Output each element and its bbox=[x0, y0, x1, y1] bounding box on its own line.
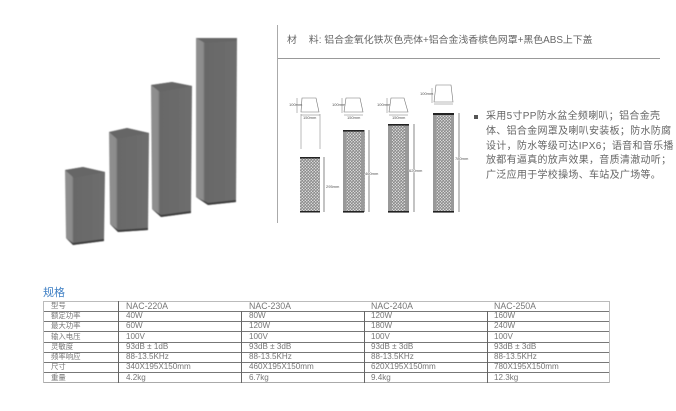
description text: 设计，防水等级可达IPX6；语音和音乐播 bbox=[486, 141, 674, 152]
product photo: four column speakers bbox=[64, 37, 238, 246]
spec table: 88-13.5KHz bbox=[371, 352, 414, 361]
spec table: NAC-220A bbox=[126, 301, 168, 311]
drawing: NAC-230A: 460mm bbox=[365, 171, 379, 176]
spec table: 尺寸 bbox=[51, 362, 66, 371]
spec table: 6.7kg bbox=[249, 373, 269, 382]
dimension drawings bbox=[289, 84, 469, 213]
spec table: 620X195X150mm bbox=[371, 362, 436, 371]
spec table: 340X195X150mm bbox=[126, 362, 191, 371]
spec table: 输入电压 bbox=[51, 332, 81, 341]
spec table: 88-13.5KHz bbox=[494, 352, 537, 361]
drawing: NAC-250A: 100mm bbox=[420, 91, 434, 96]
speaker 2 bbox=[109, 128, 149, 232]
material text: 材 料: 铝合金氧化铁灰色壳体+铝合金浅香槟色网罩+黑色ABS上下盖 bbox=[287, 35, 593, 46]
drawing: NAC-240A: 150mm bbox=[392, 115, 406, 120]
spec table: 780X195X150mm bbox=[494, 362, 559, 371]
spec table: 100V bbox=[126, 332, 145, 341]
heading: specs: 规格 bbox=[43, 287, 65, 299]
drawing: NAC-230A: 100mm bbox=[332, 102, 346, 107]
drawing: NAC-230A bbox=[332, 98, 379, 213]
spec table: 额定功率 bbox=[51, 311, 81, 320]
spec table: 型号 bbox=[51, 301, 66, 310]
spec table: 12.3kg bbox=[494, 373, 518, 382]
drawing: NAC-230A: 150mm bbox=[347, 115, 361, 120]
spec table: NAC-230A bbox=[249, 301, 291, 311]
spec table: 120W bbox=[371, 311, 392, 320]
drawing: NAC-240A bbox=[377, 98, 423, 213]
speaker 4 bbox=[196, 38, 237, 205]
description text: 体、铝合金网罩及喇叭安装板；防水防腐 bbox=[486, 126, 671, 137]
spec table: 40W bbox=[126, 311, 143, 320]
divider: vertical rule bbox=[277, 25, 278, 223]
spec table: 频率响应 bbox=[51, 352, 81, 361]
drawing: NAC-220A: 295mm bbox=[326, 184, 340, 189]
spec table: 100V bbox=[494, 332, 513, 341]
spec table: 460X195X150mm bbox=[249, 362, 314, 371]
speaker 1 bbox=[65, 167, 105, 245]
spec table: NAC-240A bbox=[371, 301, 413, 311]
spec table: NAC-250A bbox=[494, 301, 536, 311]
description text: 采用5寸PP防水盆全频喇叭；铝合金壳 bbox=[486, 111, 660, 122]
description text bbox=[486, 110, 674, 181]
spec table: 100V bbox=[249, 332, 268, 341]
spec table: 最大功率 bbox=[51, 321, 81, 330]
spec table: 重量 bbox=[51, 373, 66, 382]
drawing: NAC-240A: 100mm bbox=[377, 102, 391, 107]
spec table: 93dB ± 3dB bbox=[249, 342, 291, 351]
spec table: 93dB ± 3dB bbox=[494, 342, 536, 351]
speaker 3 bbox=[151, 82, 192, 217]
spec table: 240W bbox=[494, 321, 515, 330]
bullet bbox=[474, 115, 478, 119]
drawing: NAC-220A: 100mm bbox=[289, 102, 303, 107]
spec table: 88-13.5KHz bbox=[249, 352, 292, 361]
spec table: 120W bbox=[249, 321, 270, 330]
drawing: NAC-220A: 150mm bbox=[303, 115, 317, 120]
drawing: NAC-240A: 620mm bbox=[409, 168, 423, 173]
spec table: 160W bbox=[494, 311, 515, 320]
spec table: 93dB ± 3dB bbox=[371, 342, 413, 351]
divider: horizontal rule bbox=[278, 58, 660, 59]
spec table: 88-13.5KHz bbox=[126, 352, 169, 361]
description text: 广泛应用于学校操场、车站及广场等。 bbox=[486, 170, 661, 181]
spec table: 灵敏度 bbox=[51, 342, 73, 351]
spec table: 9.4kg bbox=[371, 373, 391, 382]
spec table: 180W bbox=[371, 321, 392, 330]
spec table: 60W bbox=[126, 321, 143, 330]
drawing: NAC-220A bbox=[289, 98, 340, 212]
description text: 放都有逼真的放声效果，音质清澈动听； bbox=[486, 155, 671, 166]
spec table: 4.2kg bbox=[126, 373, 146, 382]
spec table: 93dB ± 1dB bbox=[126, 342, 168, 351]
drawing: NAC-250A bbox=[420, 85, 469, 213]
spec table: 100V bbox=[371, 332, 390, 341]
spec table: 80W bbox=[249, 311, 266, 320]
drawing: NAC-250A: 780mm bbox=[455, 156, 469, 161]
